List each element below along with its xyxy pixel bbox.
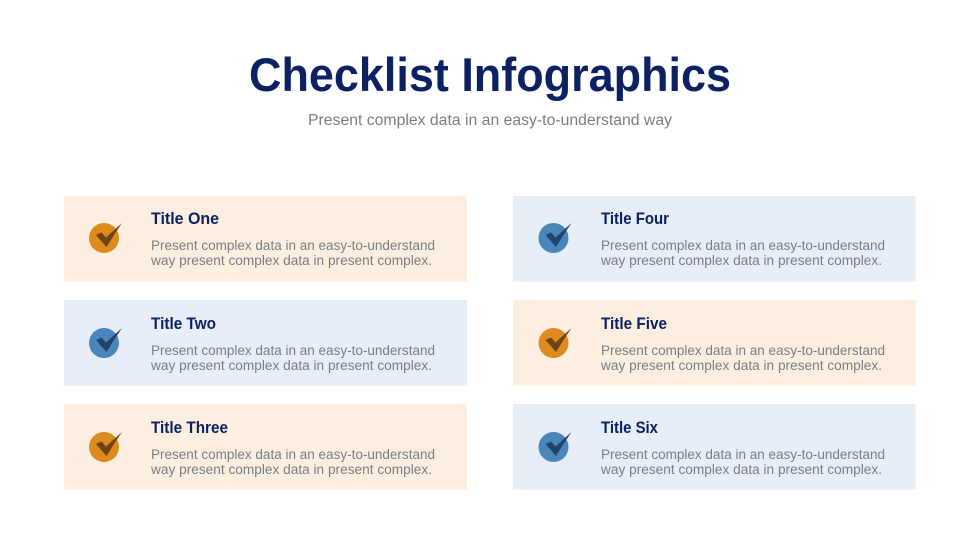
icon: orange check <box>538 328 572 358</box>
icon: blue check <box>538 223 572 253</box>
heading: title three: Title Three <box>151 418 228 437</box>
icon: blue check <box>89 328 122 358</box>
panel: title three <box>64 404 467 490</box>
text block: title four: way present complex data in present complex. <box>600 253 882 268</box>
text block: title two: way present complex data in present complex. <box>150 358 432 373</box>
heading: title six: Title Six <box>601 418 658 437</box>
text block: title five: Present complex data in an easy-to-understand <box>601 343 885 358</box>
panel: title five <box>513 300 916 386</box>
icon: orange check <box>89 223 122 253</box>
text block: title five: way present complex data in present complex. <box>600 358 882 373</box>
text block: title six: Present complex data in an easy-to-understand <box>601 447 885 462</box>
panel: title four <box>513 196 916 282</box>
text block: title six: way present complex data in present complex. <box>600 462 882 477</box>
heading: title five: Title Five <box>601 314 667 333</box>
panel: title one <box>64 196 467 282</box>
icon: orange check <box>89 432 122 462</box>
panel: title two <box>64 300 467 386</box>
text block: title three: Present complex data in an easy-to-understand <box>151 447 435 462</box>
text block: title four: Present complex data in an easy-to-understand <box>601 238 885 253</box>
heading: title one: Title One <box>151 209 219 228</box>
icon: blue check <box>538 432 572 462</box>
text block: title one: way present complex data in present complex. <box>150 253 432 268</box>
panel: title six <box>513 404 916 490</box>
text block: title one: Present complex data in an easy-to-understand <box>151 238 435 253</box>
text block: title three: way present complex data in present complex. <box>150 462 432 477</box>
heading: title two: Title Two <box>151 314 216 333</box>
heading: title four: Title Four <box>601 209 669 228</box>
title: Checklist Infographics <box>249 48 731 101</box>
text block: title two: Present complex data in an easy-to-understand <box>151 343 435 358</box>
subtitle: Present complex data in an easy-to-understand way <box>308 112 672 129</box>
